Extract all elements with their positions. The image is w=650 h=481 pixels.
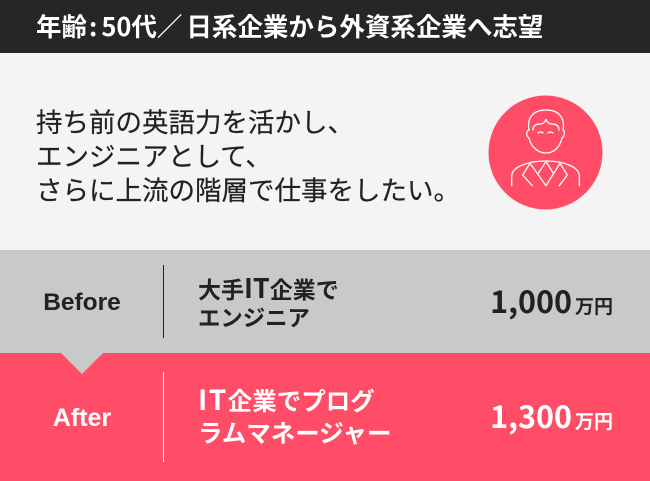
before job	[198, 267, 339, 333]
before label: Before	[43, 289, 121, 316]
motivation text: 持ち前の英語力を活かし、	[36, 101, 354, 140]
after job	[198, 379, 392, 450]
after job: ラムマネージャー	[198, 415, 392, 450]
motivation text	[36, 101, 460, 208]
arrow	[61, 353, 103, 374]
title text: 年齢:50代／日系企業から外資系企業へ志望	[36, 7, 543, 44]
after job: IT企業でプログ	[198, 379, 375, 419]
before divider	[163, 265, 164, 338]
after divider	[163, 372, 164, 462]
before salary: 1,000万円	[490, 278, 613, 322]
before job: 大手IT企業で	[198, 267, 339, 306]
panel: before	[0, 250, 650, 353]
panel: motivation	[0, 53, 650, 250]
after label: After	[53, 404, 111, 432]
before job: エンジニア	[198, 301, 310, 333]
motivation text: さらに上流の階層で仕事をしたい。	[36, 169, 460, 208]
title bar	[0, 0, 650, 53]
icon: businessman	[488, 96, 602, 210]
motivation text: エンジニアとして、	[36, 135, 272, 174]
panel: after	[0, 353, 650, 481]
after salary: 1,300万円	[490, 393, 613, 437]
